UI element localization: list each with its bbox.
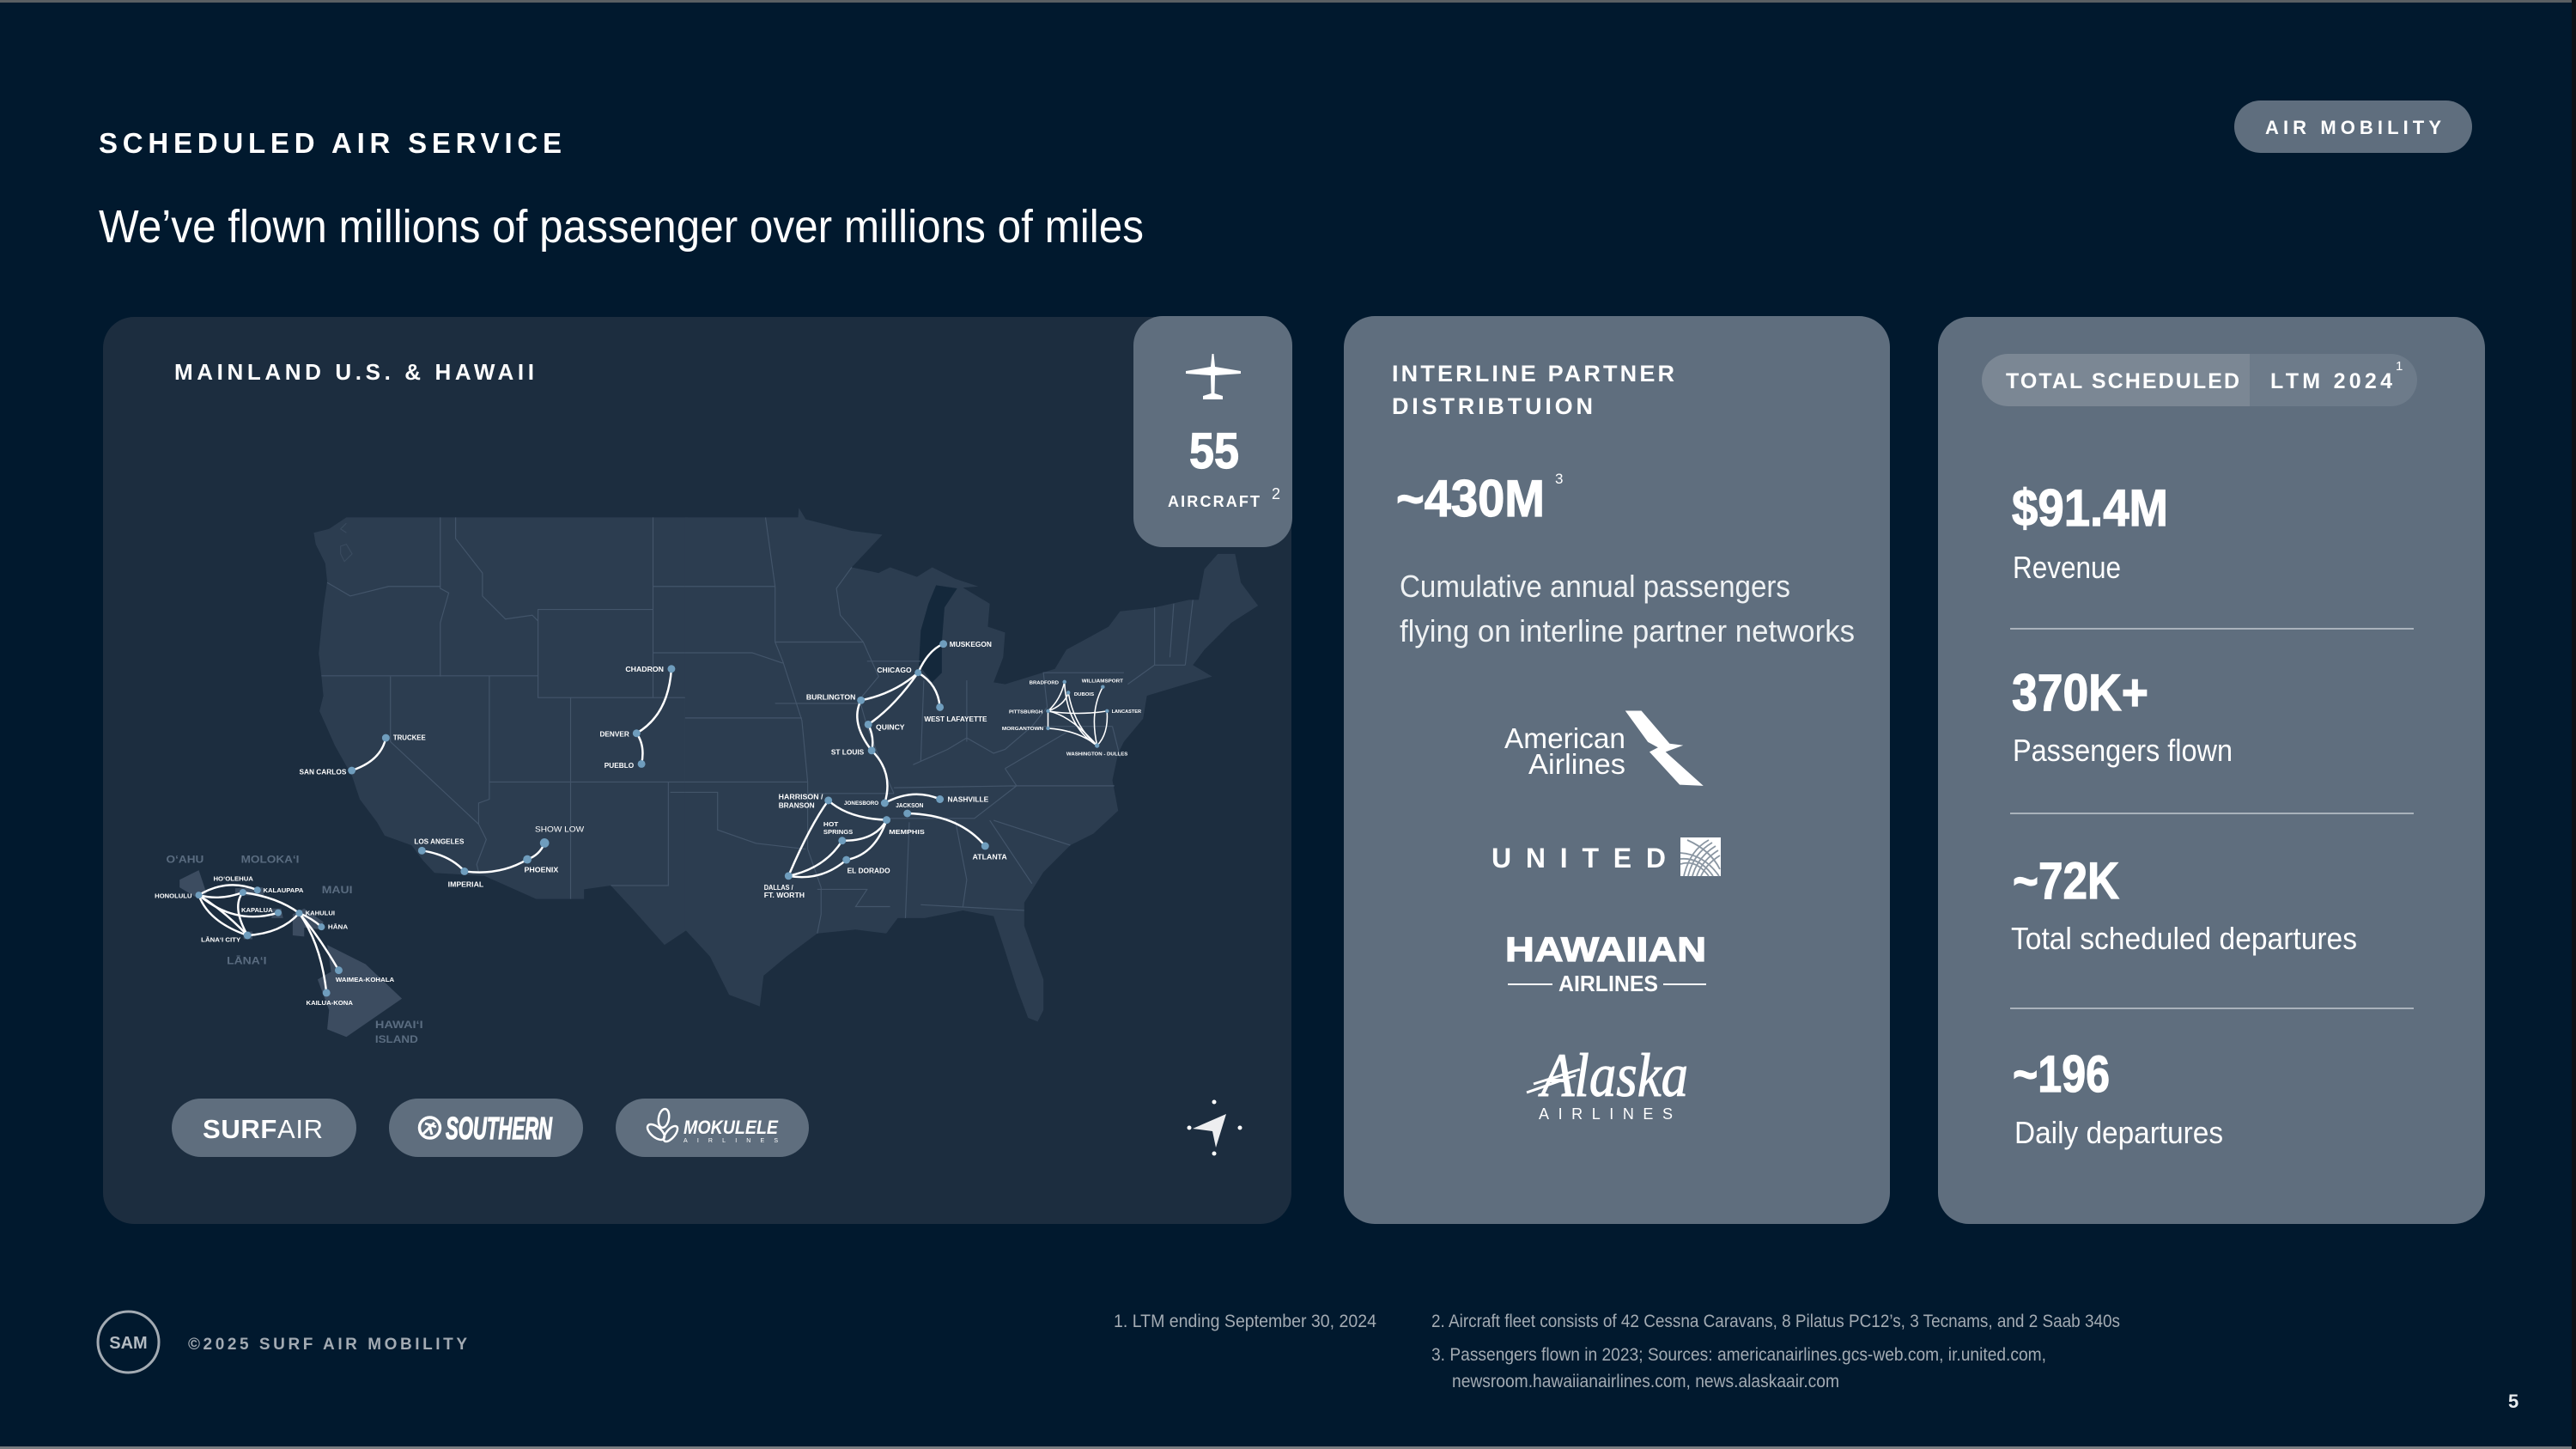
northeast city labels: WASHINGTON - DULLES [1066, 752, 1127, 758]
map: eastern US [685, 508, 1258, 1021]
stat: daily departures: ~196 [2013, 1045, 2110, 1103]
western city labels: SHOW LOW [535, 825, 584, 833]
operator logo: Surfair: SURFAIR [203, 1114, 323, 1144]
footnotes: newsroom.hawaiianairlines.com, news.alaskaair.com [1452, 1372, 1839, 1391]
stat description: flying on interline partner networks [1400, 613, 1855, 648]
western routes [199, 669, 671, 993]
western city labels [155, 665, 664, 1007]
eastern city labels [764, 640, 1007, 899]
panel heading: DISTRIBTUION [1392, 393, 1593, 419]
eastern city labels: SPRINGS [823, 828, 853, 836]
logo: United: UNITED [1492, 843, 1666, 874]
operator logo: Southern: SOUTHERN [446, 1111, 553, 1146]
map: western US and Hawaii [155, 517, 688, 1045]
western city labels: HO‘OLEHUA [213, 875, 253, 883]
eastern city labels: CHICAGO [877, 666, 912, 674]
badge: air mobility: AIR MOBILITY [2265, 117, 2441, 138]
eastern city labels: EL DORADO [848, 867, 890, 875]
panel: total scheduled stats [1938, 317, 2485, 1224]
eastern land mass [685, 508, 1258, 1021]
western city labels: LOS ANGELES [414, 837, 465, 845]
western city labels: KAHULUI [306, 909, 335, 916]
page number: 5 [2508, 1391, 2518, 1412]
island names: ISLAND [375, 1034, 418, 1045]
eastern city labels: BRANSON [779, 801, 815, 809]
northeast routes [1048, 682, 1107, 746]
panel: aircraft count: 2 [1272, 485, 1280, 502]
western land mass [313, 517, 688, 945]
stat: daily departures [2013, 1045, 2223, 1150]
eastern routes [788, 644, 985, 877]
stat description: Cumulative annual passengers [1400, 569, 1790, 604]
western city labels: LĀNA‘I CITY [201, 936, 240, 944]
eastern city labels: ST LOUIS [831, 747, 865, 756]
section heading: SCHEDULED AIR SERVICE [99, 127, 562, 159]
period pill: 1 [2396, 359, 2403, 374]
footnotes: 3. Passengers flown in 2023; Sources: americanairlines.gcs-web.com, ir.united.com, [1431, 1345, 2046, 1365]
island names [167, 855, 423, 1045]
stat: passengers flown: Passengers flown [2013, 733, 2233, 768]
logo: SAM [98, 1312, 159, 1373]
eastern city labels: ATLANTA [973, 853, 1007, 861]
operator logo: Surfair [172, 1099, 356, 1157]
western city labels: WAIMEA-KOHALA [336, 976, 395, 983]
logo: Hawaiian Airlines: AIRLINES [1558, 971, 1658, 996]
logo: Alaska Airlines: Alaska [1539, 1041, 1688, 1110]
operator logo: Mokulele: AIRLINES [683, 1138, 778, 1144]
eastern city labels: HARRISON / [779, 793, 823, 801]
eastern city labels: DALLAS / [764, 883, 793, 892]
western city labels: IMPERIAL [448, 880, 483, 888]
panel: aircraft count [1133, 316, 1292, 547]
panel heading: mainland and Hawaii: MAINLAND U.S. & HAWAII [174, 359, 534, 385]
western city labels: DENVER [599, 729, 629, 738]
island names: MOLOKA‘I [241, 855, 299, 866]
aircraft label: AIRCRAFT [1168, 493, 1260, 510]
stat description [1400, 569, 1855, 648]
eastern city labels: HOT [823, 820, 839, 828]
operator logo: Mokulele [616, 1099, 809, 1157]
eastern city labels: JONESBORO [844, 801, 878, 807]
Lake Michigan [919, 585, 957, 682]
logo: Alaska Airlines: AIRLINES [1539, 1105, 1673, 1123]
period pill: LTM 2024 [2270, 369, 2392, 393]
western city labels: KAPALUA [241, 906, 273, 914]
stat: revenue [2012, 479, 2168, 585]
logo: Hawaiian Airlines [1505, 931, 1706, 996]
stat: scheduled departures: Total scheduled departures [2011, 921, 2357, 956]
stat: passengers flown: 370K+ [2012, 664, 2148, 721]
stat: scheduled departures [2011, 852, 2357, 956]
island names: O‘AHU [167, 855, 204, 866]
northeast city labels: LANCASTER [1112, 709, 1142, 715]
island names: MAUI [322, 885, 353, 896]
island names: LĀNA‘I [227, 955, 267, 966]
western city labels: SAN CARLOS [299, 767, 347, 776]
Hawaiian islands [179, 870, 402, 1037]
stat: revenue: $91.4M [2012, 479, 2168, 537]
western city labels: TRUCKEE [393, 733, 426, 741]
partner passengers stat: 3 [1555, 471, 1563, 487]
western city labels: HĀNA [328, 922, 349, 930]
northeast city labels: PITTSBURGH [1009, 710, 1042, 715]
eastern city labels: NASHVILLE [948, 795, 989, 804]
logo: American Airlines: Airlines [1528, 748, 1625, 780]
page title: We’ve flown millions of passenger over millions of miles [99, 201, 1144, 253]
icon: airplane [1186, 354, 1241, 399]
panel heading [1392, 361, 1674, 419]
eastern city labels: QUINCY [876, 722, 905, 731]
stat: passengers flown [2012, 664, 2233, 768]
western city labels: KALAUPAPA [264, 886, 304, 894]
island names: HAWAI‘I [375, 1020, 423, 1031]
western city labels: KAILUA-KONA [307, 999, 353, 1007]
western city labels: CHADRON [625, 665, 664, 673]
footnotes: 1. LTM ending September 30, 2024 [1114, 1312, 1376, 1331]
stat: scheduled departures: ~72K [2013, 852, 2119, 910]
eastern city labels: MEMPHIS [889, 828, 925, 836]
panel: map [103, 317, 1291, 1224]
northeast city labels: DUBOIS [1074, 692, 1094, 697]
eastern airports [785, 640, 1109, 880]
western airports [195, 665, 675, 996]
panel: interline partners [1344, 316, 1890, 1224]
footnotes [1114, 1312, 2120, 1391]
logo: Alaska Airlines [1527, 1041, 1688, 1123]
operator logo: Mokulele: MOKULELE [683, 1117, 779, 1138]
period pill: TOTAL SCHEDULED [2006, 369, 2239, 393]
logo: United [1492, 837, 1721, 876]
period pill [1982, 354, 2417, 406]
aircraft number: 55 [1189, 423, 1239, 479]
operator logo: Southern [389, 1099, 583, 1157]
eastern city labels: FT. WORTH [764, 891, 805, 899]
northeast city labels [1002, 679, 1142, 758]
eastern city labels: BURLINGTON [806, 692, 855, 701]
partner passengers stat: ~430M [1396, 470, 1545, 527]
footnotes: 2. Aircraft fleet consists of 42 Cessna Caravans, 8 Pilatus PC12’s, 3 Tecnams, and 2 Saab 340s [1431, 1312, 2120, 1331]
logo: Hawaiian Airlines: HAWAIIAN [1505, 931, 1706, 969]
logo: American Airlines: American [1504, 722, 1625, 754]
western city labels: PUEBLO [605, 761, 635, 770]
northeast city labels: MORGANTOWN [1002, 727, 1043, 732]
eastern city labels: WEST LAFAYETTE [924, 715, 987, 723]
northeast city labels: BRADFORD [1030, 681, 1059, 686]
stat: revenue: Revenue [2013, 550, 2121, 585]
logo: American Airlines [1504, 711, 1704, 786]
badge: air mobility [2234, 100, 2472, 153]
northeast city labels: WILLIAMSPORT [1082, 679, 1123, 684]
eastern city labels: JACKSON [896, 802, 923, 809]
icon: compass [1187, 1099, 1242, 1156]
stat: daily departures: Daily departures [2014, 1115, 2223, 1150]
copyright: ©2025 SURF AIR MOBILITY [188, 1336, 467, 1354]
panel heading: INTERLINE PARTNER [1392, 361, 1674, 387]
western city labels: PHOENIX [525, 865, 559, 874]
logo: SAM: SAM [109, 1334, 148, 1353]
eastern city labels: MUSKEGON [950, 640, 992, 648]
western city labels: HONOLULU [155, 892, 192, 900]
